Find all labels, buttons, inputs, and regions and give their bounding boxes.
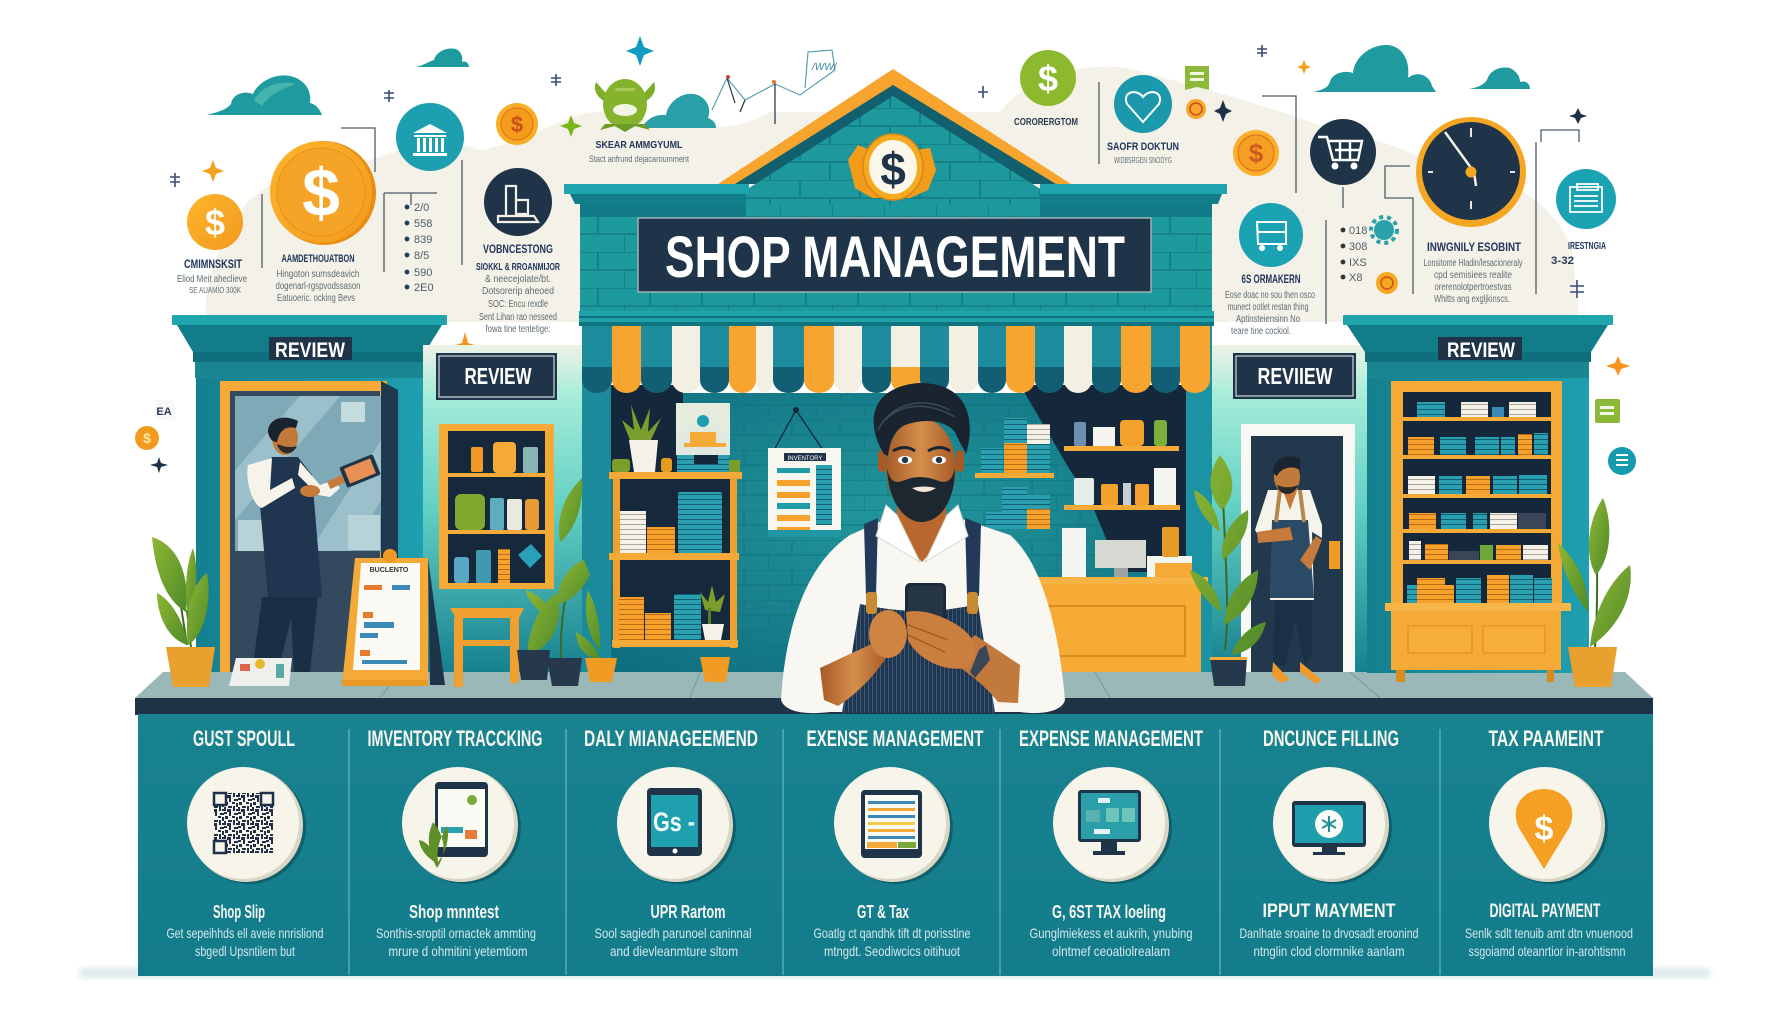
- cloud right small: [1469, 68, 1530, 89]
- cloud right large: [1313, 45, 1436, 92]
- coin: large dollar: $: [302, 155, 340, 231]
- ledge: [579, 311, 1214, 326]
- interior: [611, 385, 1186, 672]
- text: clock label: Whitts ang exgljkinscs.: [1434, 294, 1510, 305]
- text: coin label: dogenarl-rgspvodssason: [276, 281, 360, 292]
- middle-left mint wall: [423, 345, 582, 687]
- list: left numbers: 590: [414, 267, 432, 279]
- cloud top centre: [642, 94, 716, 128]
- review sign: REVIEW: [275, 339, 345, 362]
- text: top centre-left label: [589, 139, 689, 164]
- text: top centre-left label: Stact anfrund dejacaroumment: [589, 154, 689, 164]
- icon: green dollar: $: [1038, 58, 1058, 99]
- floor: [135, 672, 1653, 715]
- column 7: ssgoiamd oteanrtior in-arohtismn: [1468, 943, 1626, 959]
- central shopkeeper: [781, 383, 1065, 713]
- stool: [450, 608, 524, 687]
- cloud left large: [207, 75, 322, 115]
- text: teal cart label: Eose doac no sou then osco: [1225, 290, 1315, 301]
- potted plant on shelf top: [612, 405, 672, 472]
- floor flyer: [229, 658, 292, 686]
- column 4: mtngdt. Seodiwcics oitihuot: [824, 943, 960, 959]
- column 4: EXENSE MANAGEMENT: [806, 726, 984, 751]
- emblem: $: [880, 143, 906, 195]
- text: teal cart label: munect ootlet restan thing: [1228, 302, 1308, 313]
- text: coin label: Eatuoeric. ocking Bevs: [277, 293, 355, 304]
- left interior shelf unit: [609, 403, 742, 648]
- column 3: UPR Rartom: [650, 902, 726, 922]
- side icon: EA tag: EA: [156, 406, 172, 418]
- text: storage label: & neecejolate/bt.: [485, 274, 551, 285]
- text: teal cart label: teare tine cockiol.: [1231, 326, 1291, 337]
- text: storage label: SOC: Encu rexdle: [488, 299, 548, 310]
- column 6: DNCUNCE FILLING: [1263, 726, 1399, 751]
- books on left shelf: [619, 492, 722, 640]
- side pillars: [582, 326, 1212, 672]
- coin: small orange top: $: [511, 112, 523, 137]
- review sign centre-right: [1233, 353, 1356, 399]
- list: left numbers: [405, 202, 434, 294]
- text: coin label: Hingoton sumsdeavich: [276, 269, 360, 280]
- column 2: Shop mnntest: [409, 902, 499, 922]
- text: left label: CMIMNSKSIT: [184, 259, 242, 271]
- list: right numbers: 308: [1349, 241, 1367, 253]
- display counter: [1385, 603, 1571, 682]
- text: left label: [177, 259, 247, 295]
- text: heart badge label: SAOFR DOKTUN: [1107, 141, 1179, 153]
- icon: clock: [1416, 117, 1526, 227]
- text: teal cart label: Aptinsteiensinn No: [1236, 314, 1300, 325]
- text: printer label: IRESTNGIA: [1568, 240, 1606, 252]
- coin: small orange top: [496, 103, 538, 145]
- small sparkle stars: [150, 36, 1630, 473]
- icon: green dollar: [1020, 50, 1076, 106]
- door: [1241, 424, 1355, 672]
- sandwich board: BUCLENTO: [370, 567, 409, 574]
- list: left numbers: 2/0: [414, 202, 429, 214]
- column 4: [806, 726, 984, 959]
- hanging price chart: INVENTORY: [788, 456, 822, 462]
- column 7: [1465, 726, 1633, 959]
- column 3: Sool sagiedh parunoel caninnal: [594, 925, 752, 941]
- coin: small dollar: [187, 194, 243, 250]
- bookcase: [1391, 381, 1562, 605]
- column 6: IPPUT MAYMENT: [1262, 901, 1396, 922]
- list: left numbers: 839: [414, 234, 432, 246]
- text: clock label: INWGNILY ESOBINT: [1427, 242, 1521, 254]
- hanging price chart: [768, 407, 841, 537]
- column 6: [1240, 726, 1418, 959]
- monitor and papers: [1062, 527, 1192, 577]
- icon: green monster: [595, 79, 655, 132]
- stacked books right: [981, 418, 1050, 529]
- list: left numbers: 2E0: [414, 282, 434, 294]
- connector lines: [262, 82, 1579, 324]
- icon: bank: [396, 103, 464, 171]
- text: teal cart label: [1225, 274, 1315, 337]
- column 6: ntnglin clod clormnike aanlam: [1254, 943, 1404, 959]
- column 3: Gs -: [653, 807, 695, 837]
- text: left label: Eliod Meit aheclieve: [177, 273, 247, 285]
- text: teal cart label: 6S ORMAKERN: [1242, 274, 1300, 286]
- poster: [676, 403, 740, 472]
- text: storage label: Dotsorerip aheoed: [482, 286, 554, 297]
- text: heart badge label: WIDBSRGEN SNODYG: [1114, 155, 1172, 165]
- panel: features: [138, 714, 1653, 976]
- column 1: Shop Slip: [213, 902, 265, 922]
- icon: sketched chart: [712, 50, 838, 124]
- left side building: [172, 315, 447, 682]
- column 1: GUST SPOULL: [193, 726, 295, 751]
- text: storage label: Sent Lihan rao nesseed: [479, 312, 557, 323]
- right side building: [1343, 315, 1613, 682]
- column 4: Goatlg ct qandhk tift dt porisstine: [814, 925, 971, 941]
- icon: shopping cart: [1310, 119, 1376, 185]
- right interior shelves: [975, 418, 1180, 529]
- cream background blob: [205, 67, 1580, 322]
- plant: centre-left: [526, 478, 590, 660]
- text: left label: SE AUAMIO 300K: [189, 286, 242, 295]
- coin: small dollar: $: [205, 202, 225, 243]
- list: right numbers: IXS: [1349, 257, 1367, 269]
- review sign: REVIEW: [1447, 339, 1515, 362]
- column 7: $: [1535, 810, 1554, 848]
- column 1: [166, 726, 324, 959]
- review sign centre-left: REVIEW: [464, 363, 532, 389]
- column 3: [584, 726, 758, 959]
- column 5: Gunglmiekess et aukrih, ynubing: [1030, 925, 1192, 941]
- title sign: SHOP MANAGEMENT: [665, 225, 1125, 290]
- icon: heart badge: [1114, 75, 1172, 133]
- orange pot: [700, 657, 730, 682]
- review sign centre-left: [436, 353, 557, 400]
- column 4: GT & Tax: [857, 902, 909, 922]
- brick wall: [580, 205, 1212, 311]
- column 5: [1019, 726, 1203, 959]
- column 1: Get sepeihhds ell aveie nnrisliond: [166, 925, 324, 941]
- text: heart badge label: [1107, 141, 1179, 165]
- books on bookcase: [1407, 402, 1552, 603]
- coin: large dollar: [270, 141, 376, 245]
- column 5: G, 6ST TAX loeling: [1052, 902, 1166, 922]
- text: clock label: Lonsitome Hladin/lesacioneraly: [1424, 258, 1522, 269]
- column 5: EXPENSE MANAGEMENT: [1019, 726, 1203, 751]
- emblem: [848, 134, 936, 200]
- ground shadow: [80, 968, 1710, 978]
- side badge teal: [1608, 447, 1636, 475]
- list: right numbers: X8: [1349, 272, 1362, 284]
- review sign centre-right: REVIIEW: [1258, 363, 1333, 389]
- text: printer label: 3-32: [1551, 255, 1574, 267]
- plant: near pillar: [576, 590, 617, 682]
- text: clock label: cpd semisiees realite: [1434, 270, 1512, 281]
- roof gable: [718, 69, 1071, 220]
- text: storage label: fowa tine tentetige:: [486, 324, 550, 335]
- main shop facade: [564, 69, 1227, 672]
- door frame: [220, 381, 398, 673]
- bottles right: [1074, 420, 1176, 505]
- small coin top right: [1186, 99, 1206, 119]
- column 2: mrure d ohmitini yetemtiom: [388, 943, 528, 959]
- column 2: Sonthis-sroptil ornactek ammting: [376, 925, 536, 941]
- dark pots: [517, 650, 582, 686]
- column 5: olntmef ceoatiolrealam: [1052, 943, 1170, 959]
- right mint wall: [1212, 345, 1367, 684]
- text: storage label: SIOKKL & RROANMIJOR: [476, 261, 560, 273]
- plant: centre-right: [1190, 455, 1266, 686]
- plant: left large: [152, 537, 209, 647]
- wall shelf with jars: [439, 424, 554, 589]
- text: clock label: [1424, 242, 1522, 305]
- column 7: DIGITAL PAYMENT: [1490, 901, 1601, 922]
- side note green: [1595, 399, 1620, 423]
- side coin left: $: [143, 430, 151, 446]
- coin right: $: [1249, 138, 1264, 168]
- column 2: IMVENTORY TRACCKING: [368, 726, 542, 751]
- small shelf plant: [700, 585, 725, 640]
- column 2: [368, 726, 542, 959]
- man with tablet: [247, 418, 381, 682]
- list: left numbers: 8/5: [414, 250, 429, 262]
- text: top centre-left label: SKEAR AMMGYUML: [596, 139, 683, 151]
- counter: [1037, 527, 1208, 681]
- column 6: Danlhate sroaine to drvosadt eroonind: [1240, 925, 1418, 941]
- column 3: DALY MIANAGEEMEND: [584, 726, 758, 751]
- cornice: [564, 184, 1227, 217]
- icon: teal gear: [1371, 217, 1397, 243]
- column 7: TAX PAAMEINT: [1488, 726, 1604, 751]
- icon: dark circle tools: [484, 168, 552, 236]
- pot: right large: [1568, 647, 1617, 687]
- list: right numbers: 018: [1349, 225, 1367, 237]
- list: left numbers: 558: [414, 218, 432, 230]
- side coin left: [135, 426, 159, 450]
- text: clock label: orerenolotpertroestvas: [1434, 282, 1512, 293]
- column 3: and dievleanmture sltom: [610, 943, 738, 959]
- list: right numbers: [1341, 225, 1367, 284]
- awning: [582, 326, 1210, 393]
- icon: printer badge: [1556, 169, 1616, 229]
- text: coin label: [276, 253, 360, 304]
- coin right: [1233, 130, 1279, 176]
- column 1: sbgedl Upsntilem but: [195, 943, 295, 959]
- text: storage label: [476, 244, 560, 335]
- column 7: Senlk sdlt tenuib amt dtn vnuenood: [1465, 925, 1633, 941]
- title sign: [638, 218, 1151, 292]
- pot: left large: [166, 647, 215, 687]
- icon: green note: [1185, 66, 1209, 90]
- cloud left small: [416, 49, 469, 67]
- plant: right large: [1558, 498, 1631, 647]
- head: [874, 383, 970, 522]
- sandwich board: [342, 549, 445, 686]
- text: green dollar label: CORORERGTOM: [1014, 116, 1078, 128]
- icon: teal cart: [1239, 203, 1303, 267]
- man in apron: [1255, 456, 1322, 684]
- text: coin label: AAMDETHOUATBON: [282, 253, 355, 265]
- text: storage label: VOBNCESTONG: [483, 244, 553, 256]
- coin small right: [1376, 272, 1398, 294]
- icon: sketched chart: /WW/: [811, 62, 838, 73]
- side icon: EA tag: [155, 400, 175, 420]
- arms and hands: [820, 583, 1020, 706]
- text: printer label: [1551, 240, 1606, 267]
